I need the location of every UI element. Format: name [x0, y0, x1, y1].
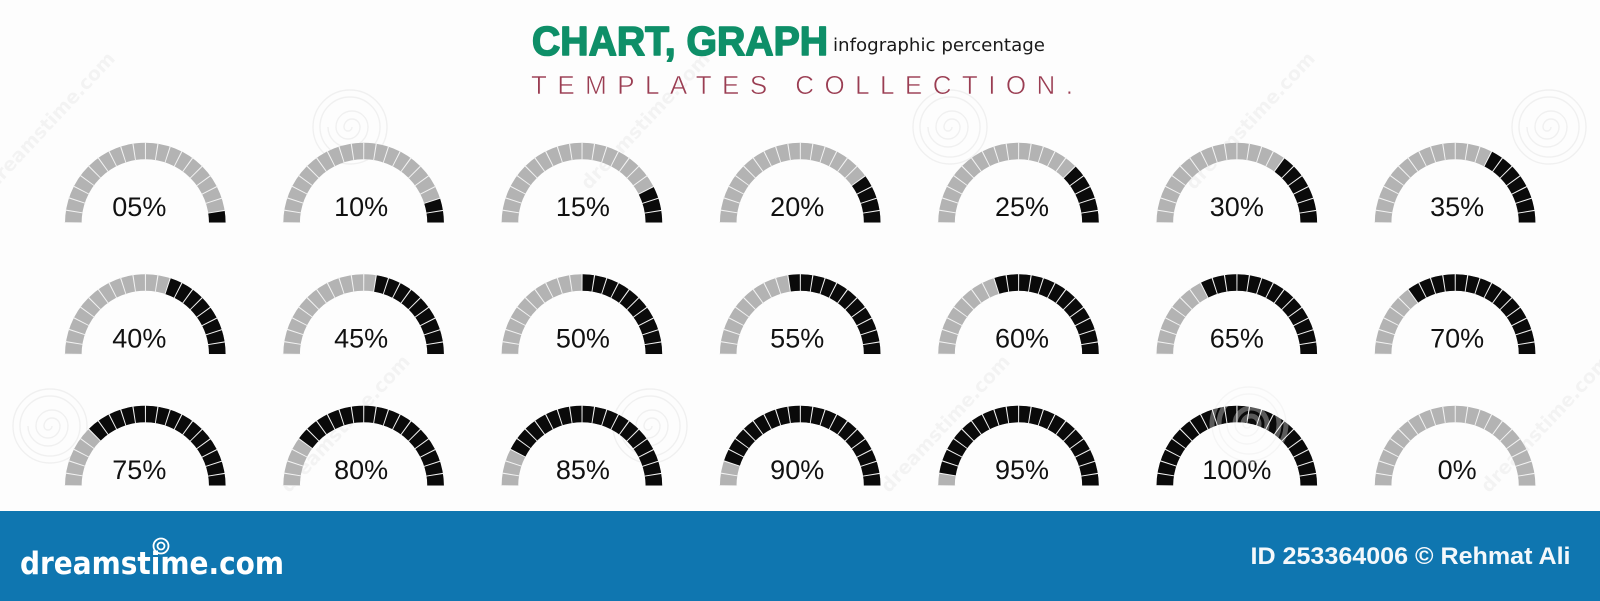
gauge: 95%: 95% — [995, 455, 1049, 485]
gauge: 35% — [1383, 151, 1527, 223]
image id and author: ID 253364006 © Rehmat Ali — [1250, 543, 1570, 570]
gauge: 0%: 0% — [1438, 455, 1477, 485]
gauge: 10% — [292, 151, 436, 223]
gauge: 90%: 90% — [770, 455, 824, 485]
gauge: 50% — [510, 282, 654, 354]
gauge: 90% — [728, 414, 872, 486]
gauge: 80%: 80% — [334, 455, 388, 485]
gauge: 0% — [1383, 414, 1527, 486]
gauge: 05% — [73, 151, 217, 223]
gauge: 65% — [1165, 282, 1309, 354]
gauge: 40% — [73, 282, 217, 354]
gauge: 45% — [292, 282, 436, 354]
gauge: 100%: 100% — [1202, 455, 1271, 485]
gauge: 85%: 85% — [556, 455, 610, 485]
watermark: spiral over 100% gauge — [1212, 387, 1286, 461]
gauge: 45%: 45% — [334, 324, 388, 354]
heading: chart, graph: CHART, GRAPH — [532, 18, 828, 64]
title — [531, 18, 1073, 100]
gauge: 70% — [1383, 282, 1527, 354]
logo: dreamstime.com: dreamstime.com — [20, 546, 284, 582]
gauge: 60%: 60% — [995, 324, 1049, 354]
watermark: spirals and diagonal text: dreamstime.com — [576, 48, 715, 194]
subheading: infographic percentage: infographic percentage — [833, 36, 1045, 56]
footer banner — [0, 511, 1600, 601]
gauge: 60% — [946, 282, 1090, 354]
gauge: 80% — [292, 414, 436, 486]
gauge: 75%: 75% — [112, 455, 166, 485]
gauge: 30%: 30% — [1210, 192, 1264, 222]
gauge: 50%: 50% — [556, 324, 610, 354]
icon: logo spiral — [154, 538, 168, 554]
watermark: spirals and diagonal text: dreamstime.com — [276, 351, 415, 497]
gauge: 55%: 55% — [770, 324, 824, 354]
gauge: 75% — [73, 414, 217, 486]
gauge: 85% — [510, 414, 654, 486]
gauge: 20%: 20% — [770, 192, 824, 222]
gauge: 25% — [946, 151, 1090, 223]
gauge: 20% — [728, 151, 872, 223]
subheading: templates collection: TEMPLATES COLLECTION. — [531, 70, 1073, 100]
watermark: spirals and diagonal text: dreamstime.com — [876, 351, 1015, 497]
watermark: spirals and diagonal text: dreamstime.com — [1181, 48, 1320, 194]
gauge: 40%: 40% — [112, 324, 166, 354]
gauge: 25%: 25% — [995, 192, 1049, 222]
gauge: 10%: 10% — [334, 192, 388, 222]
watermark: spirals and diagonal text — [0, 48, 1600, 497]
gauge: 05%: 05% — [112, 192, 166, 222]
gauge: 65%: 65% — [1210, 324, 1264, 354]
gauge: 15% — [510, 151, 654, 223]
gauge: 100% — [1165, 414, 1309, 486]
gauge: 95% — [946, 414, 1090, 486]
gauge: 70%: 70% — [1430, 324, 1484, 354]
gauge: 35%: 35% — [1430, 192, 1484, 222]
gauge: 55% — [728, 282, 872, 354]
gauge: 30% — [1165, 151, 1309, 223]
gauge: 15%: 15% — [556, 192, 610, 222]
